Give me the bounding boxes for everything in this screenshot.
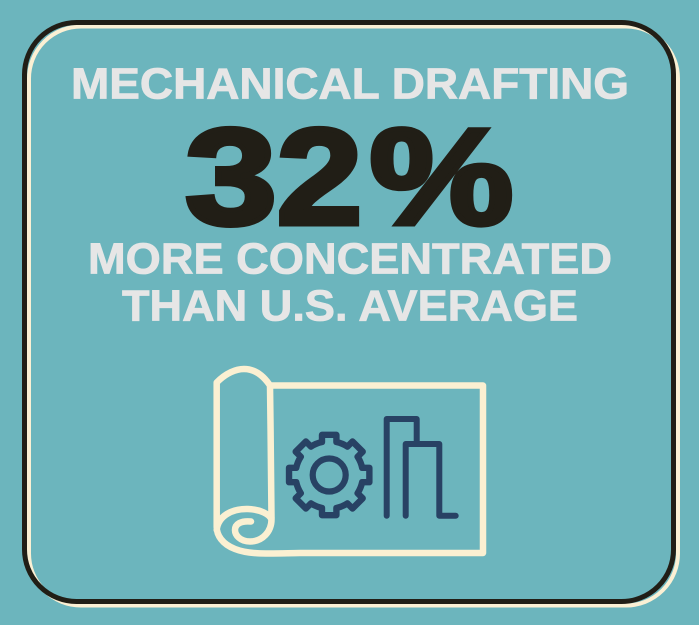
big number: 32%: 3 [185, 101, 277, 254]
text block: more concentrated than U.S. average [88, 236, 612, 331]
big number: 32%: 2 [276, 101, 362, 254]
text block: more concentrated than U.S. average: THAN U.S. AVERAGE [122, 283, 578, 331]
big number: 32% [185, 101, 514, 254]
heading: mechanical drafting: MECHANICAL DRAFTING [71, 61, 629, 109]
icon part: paper scroll [217, 369, 483, 554]
text block: more concentrated than U.S. average: MORE CONCENTRATED [88, 236, 612, 284]
icon part: buildings [387, 419, 456, 516]
icon: blueprint scroll with gear and buildings [217, 369, 483, 554]
big number: 32%: % [370, 101, 514, 254]
icon part: gear [289, 435, 369, 515]
